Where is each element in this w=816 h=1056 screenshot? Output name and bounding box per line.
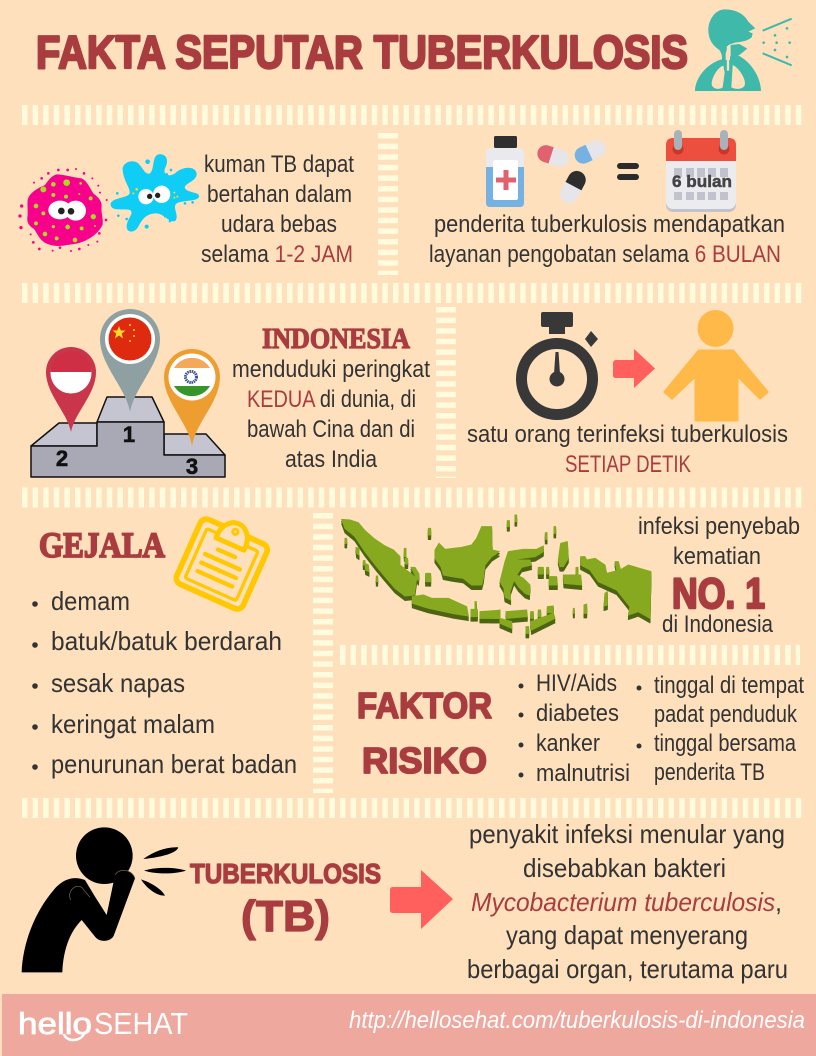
text: definisi TB: Mycobacterium tuberculosis, — [471, 887, 782, 917]
icon: pills — [535, 138, 608, 206]
arrow — [390, 870, 453, 929]
list: gejala: sesak napas — [51, 668, 185, 698]
text: kuman TB: bertahan dalam — [207, 181, 352, 208]
heading: faktor risiko — [357, 685, 492, 781]
list: gejala: demam — [51, 586, 130, 616]
icon: calendar — [666, 130, 736, 212]
list: faktor risiko 2: penderita TB — [654, 759, 765, 786]
heading: faktor risiko: RISIKO — [362, 740, 487, 781]
podium numbers — [56, 422, 198, 479]
text: satu orang: satu orang terinfeksi tuberkulosis — [467, 421, 788, 448]
heading: Gejala: GEJALA — [39, 525, 165, 565]
text: kuman TB: udara bebas — [221, 211, 337, 238]
text: infeksi penyebab kematian: di Indonesia — [662, 611, 774, 638]
text: menduduki peringkat: menduduki peringkat — [232, 356, 430, 383]
list: faktor risiko 2 — [636, 672, 804, 786]
pin: Indonesia — [46, 347, 96, 432]
icon: stopwatch — [522, 312, 598, 414]
list: gejala: batuk/batuk berdarah — [51, 626, 282, 656]
podium numbers: 2 — [56, 446, 68, 471]
text: infeksi penyebab kematian — [638, 513, 800, 638]
list: faktor risiko 1: malnutrisi — [536, 760, 630, 787]
list: faktor risiko 1: diabetes — [536, 700, 619, 727]
icon: medicine bottle — [486, 136, 524, 207]
logo: helloSEHAT: SEHAT — [94, 1006, 188, 1041]
pin: India — [164, 349, 220, 446]
text: penderita tuberkulosis: penderita tuberkulosis mendapatkan — [434, 211, 785, 238]
list: faktor risiko 1: kanker — [536, 730, 600, 757]
list: gejala — [32, 586, 297, 779]
podium — [31, 397, 225, 477]
big number: No. 1: NO. 1 — [672, 570, 765, 618]
text: satu orang — [467, 421, 788, 478]
icon: calendar: 6 bulan — [672, 172, 732, 191]
title: FAKTA SEPUTAR TUBERKULOSIS — [36, 26, 688, 78]
icon: clipboard — [174, 509, 273, 611]
icon: pink germ — [18, 168, 108, 252]
arrow — [613, 349, 655, 388]
footer band — [2, 994, 816, 1056]
podium numbers: 1 — [123, 422, 135, 447]
text: menduduki peringkat: KEDUA di dunia, di — [247, 386, 416, 413]
text: menduduki peringkat: bawah Cina dan di — [247, 416, 415, 443]
text: definisi TB — [467, 819, 788, 984]
text: menduduki peringkat — [232, 356, 430, 473]
heading: faktor risiko: FAKTOR — [357, 685, 492, 726]
icon: person — [665, 310, 767, 420]
text: definisi TB: disebabkan bakteri — [523, 853, 726, 883]
map of Indonesia — [342, 515, 651, 638]
logo: helloSEHAT: hello — [18, 1006, 92, 1041]
text: kuman TB: kuman TB dapat — [204, 151, 354, 178]
text: penderita tuberkulosis: layanan pengobatan selama 6 BULAN — [429, 241, 781, 268]
list: faktor risiko 1 — [518, 670, 630, 787]
heading: tuberkulosis (TB): TUBERKULOSIS — [190, 858, 381, 889]
text: menduduki peringkat: atas India — [285, 446, 378, 473]
text: definisi TB: yang dapat menyerang — [506, 920, 748, 950]
list: gejala: penurunan berat badan — [51, 749, 297, 779]
heading: tuberkulosis (TB): (TB) — [241, 892, 330, 941]
text: penderita tuberkulosis — [429, 211, 785, 268]
icon: head and lungs coughing — [695, 9, 792, 91]
list: faktor risiko 1: HIV/Aids — [536, 670, 617, 697]
text: infeksi penyebab kematian: infeksi penyebab — [638, 513, 800, 540]
text: satu orang: SETIAP DETIK — [565, 451, 691, 478]
icon: coughing person — [22, 827, 186, 972]
icon: equals sign — [617, 163, 639, 180]
list: gejala: keringat malam — [51, 709, 215, 739]
text: infeksi penyebab kematian: kematian — [673, 543, 761, 570]
heading: Indonesia: INDONESIA — [262, 323, 410, 355]
heading: tuberkulosis (TB) — [190, 858, 381, 941]
text: kuman TB: selama 1-2 JAM — [201, 241, 353, 268]
pin: China — [100, 309, 160, 412]
logo: helloSEHAT — [18, 1006, 188, 1041]
text: definisi TB: penyakit infeksi menular yang — [469, 819, 785, 849]
text: definisi TB: berbagai organ, terutama paru — [467, 954, 788, 984]
podium numbers: 3 — [186, 454, 198, 479]
icon: blue germ — [111, 154, 199, 232]
text: kuman TB — [201, 151, 354, 268]
